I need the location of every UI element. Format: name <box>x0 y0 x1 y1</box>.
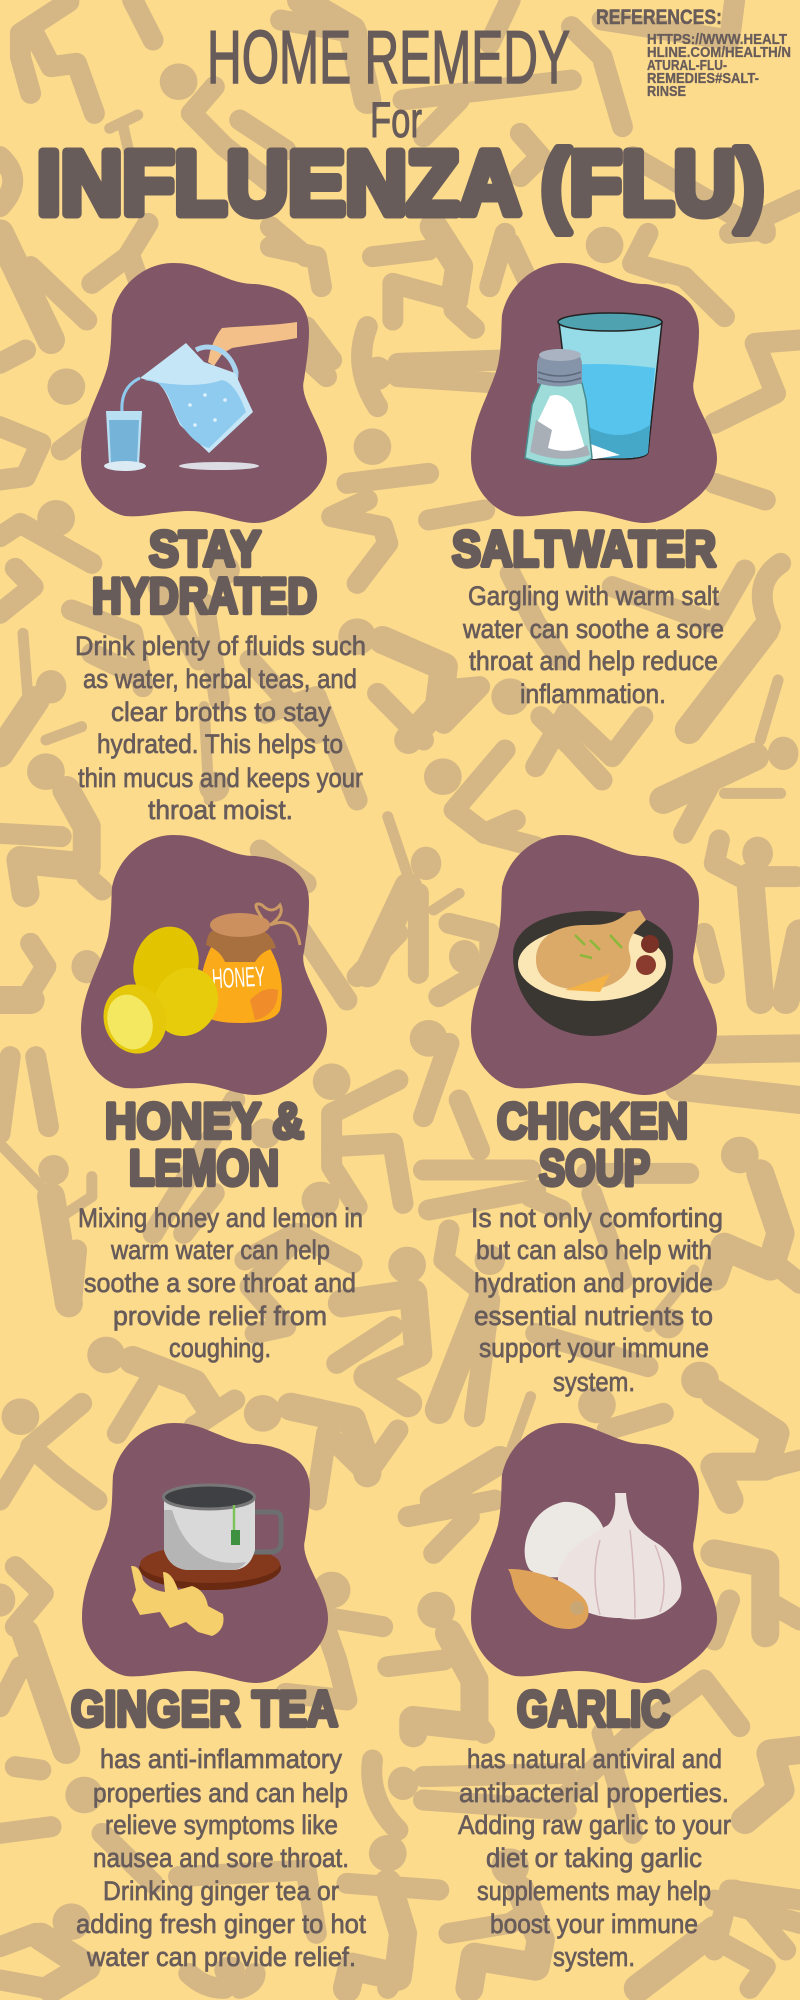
body text: has anti-inflammatory <box>100 1744 342 1774</box>
panel: saltwater <box>452 263 724 709</box>
icon: bowl of chicken soup <box>513 910 673 1036</box>
body text: properties and can help <box>93 1778 348 1808</box>
body text: relieve symptoms like <box>105 1810 338 1840</box>
body text: essential nutrients to <box>474 1301 713 1331</box>
references block: REMEDIES#SALT- <box>647 70 759 87</box>
body text: warm water can help <box>110 1235 330 1265</box>
body text: adding fresh ginger to hot <box>76 1909 366 1939</box>
blob background <box>81 263 327 523</box>
body text <box>78 1203 363 1363</box>
references block <box>596 6 791 100</box>
title: influenza (flu): INFLUENZA (FLU) <box>37 134 764 234</box>
panel: ginger tea <box>71 1423 366 1972</box>
panel: chicken soup <box>471 835 723 1397</box>
heading: HONEY & <box>105 1093 304 1149</box>
body text <box>462 581 724 709</box>
icon: honey jar and lemons <box>94 904 300 1062</box>
body text: water can provide relief. <box>86 1942 356 1972</box>
body text: has natural antiviral and <box>467 1744 722 1774</box>
icon: salt shaker and glass of water <box>525 313 662 466</box>
body text: throat and help reduce <box>469 646 718 676</box>
heading: STAY <box>149 521 261 577</box>
body text: as water, herbal teas, and <box>83 664 357 694</box>
heading: GINGER TEA <box>71 1681 338 1737</box>
body text: system. <box>553 1942 635 1972</box>
title: for: For <box>370 92 422 148</box>
body text: nausea and sore throat. <box>93 1843 349 1873</box>
honey label: HONEY <box>211 961 266 994</box>
body text: supplements may help <box>477 1876 711 1906</box>
blob background <box>81 835 327 1095</box>
body text: thin mucus and keeps your <box>78 763 363 793</box>
body text: inflammation. <box>520 679 666 709</box>
panel: chicken soup: SOUP <box>539 1140 650 1196</box>
body text: Gargling with warm salt <box>468 581 719 611</box>
body text: but can also help with <box>476 1235 712 1265</box>
body text: hydrated. This helps to <box>97 729 343 759</box>
panel: stay hydrated <box>75 263 366 825</box>
references block: REFERENCES: <box>596 6 722 29</box>
body text: provide relief from <box>113 1301 327 1331</box>
body text: clear broths to stay <box>111 697 331 727</box>
references block: RINSE <box>647 83 686 100</box>
body text: coughing. <box>169 1333 271 1363</box>
body text <box>75 631 366 825</box>
body text: soothe a sore throat and <box>84 1268 356 1298</box>
heading: GARLIC <box>517 1681 670 1737</box>
body text: Mixing honey and lemon in <box>78 1203 363 1233</box>
panel: stay hydrated: HYDRATED <box>92 568 317 624</box>
body text: diet or taking garlic <box>486 1843 702 1873</box>
blob background <box>471 835 717 1095</box>
body text <box>471 1203 723 1397</box>
body text: hydration and provide <box>474 1268 713 1298</box>
blob background <box>471 1423 717 1683</box>
body text: system. <box>553 1367 635 1397</box>
body text <box>458 1744 731 1972</box>
body text: support your immune <box>479 1333 709 1363</box>
references block: HTTPS://WWW.HEALT <box>647 31 787 48</box>
title: home remedy: HOME REMEDY <box>207 15 570 99</box>
icon: tea cup with ginger root <box>131 1485 281 1636</box>
body text: Drink plenty of fluids such <box>75 631 366 661</box>
body text: Adding raw garlic to your <box>458 1810 731 1840</box>
body text <box>76 1744 366 1972</box>
body text: boost your immune <box>490 1909 698 1939</box>
body text: Is not only comforting <box>471 1203 723 1233</box>
blob background <box>471 263 717 523</box>
icon: garlic bulbs and clove <box>508 1493 681 1629</box>
body text: Drinking ginger tea or <box>103 1876 339 1906</box>
body text: water can soothe a sore <box>462 614 724 644</box>
panel: honey and lemon <box>78 835 363 1363</box>
references block: ATURAL-FLU- <box>647 57 727 74</box>
panel: garlic <box>458 1423 731 1972</box>
body text: throat moist. <box>148 795 293 825</box>
blob background <box>82 1423 328 1683</box>
heading: CHICKEN <box>497 1093 688 1149</box>
heading: SALTWATER <box>452 521 716 577</box>
body text: antibacterial properties. <box>459 1778 729 1808</box>
panel: honey and lemon: LEMON <box>129 1140 279 1196</box>
icon: hand pouring water pitcher into glass <box>104 322 297 471</box>
